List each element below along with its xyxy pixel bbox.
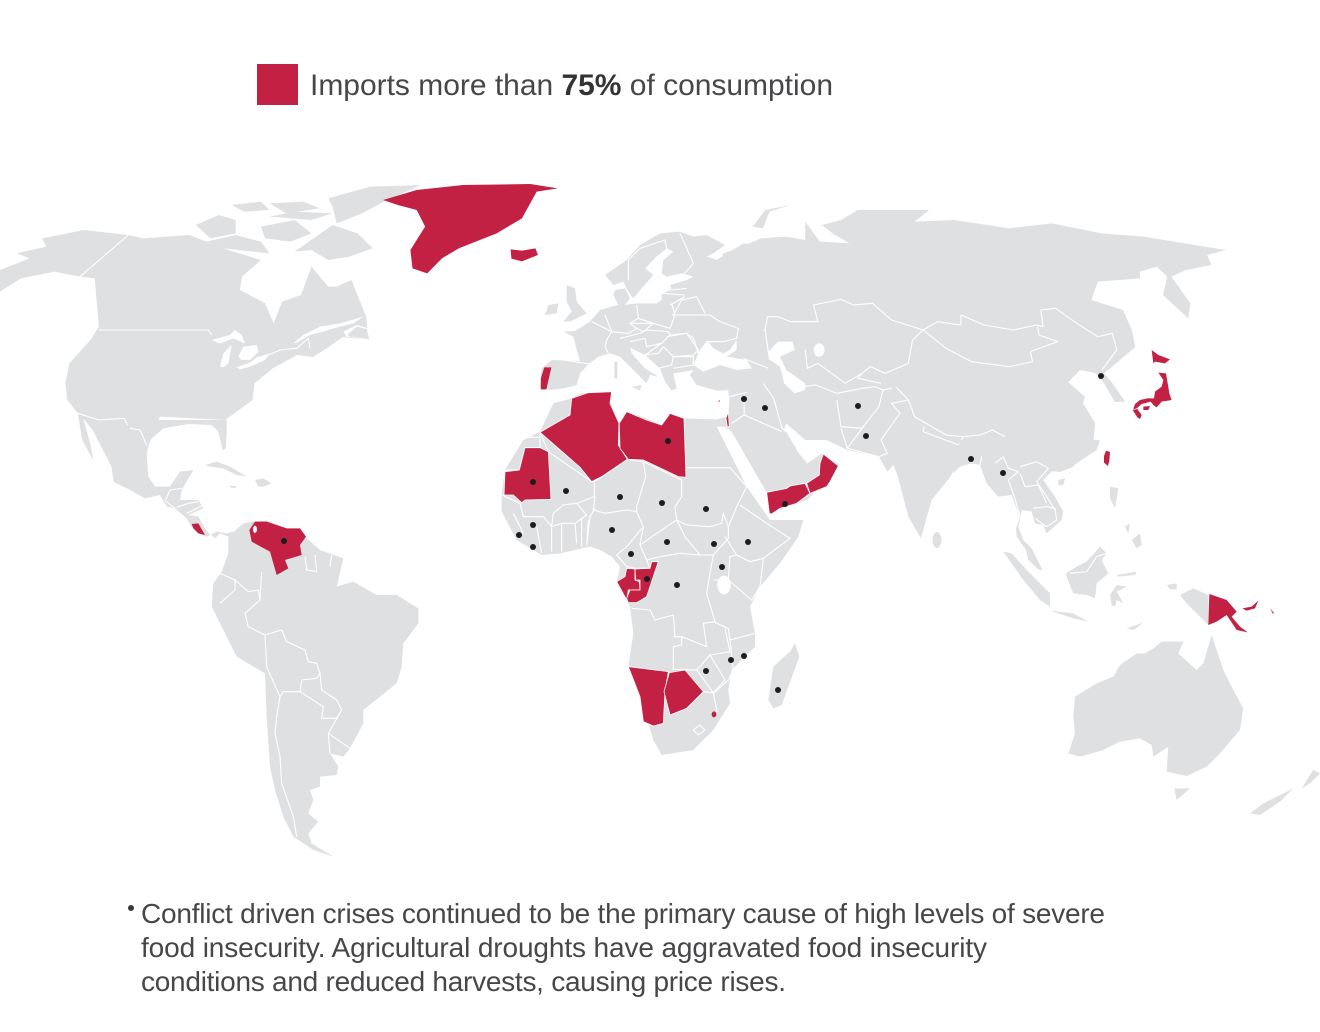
world map xyxy=(0,184,1320,857)
footnote text block xyxy=(128,898,1105,997)
footnote line 1: Conflict driven crises continued to be the primary cause of high levels of severe xyxy=(141,898,1105,929)
land: Africa and Madagascar with country borders xyxy=(502,392,803,755)
highlight: African and Middle East countries xyxy=(504,392,838,726)
bullet xyxy=(128,905,134,911)
highlighted countries: import more than 75% of consumption xyxy=(192,184,1274,726)
water: Great Lakes and Gulf of St Lawrence xyxy=(200,317,370,369)
black dots: countries in crisis xyxy=(281,373,1104,693)
land: Europe with country borders xyxy=(540,232,768,395)
highlight: Greenland, Iceland, Portugal xyxy=(383,184,558,389)
highlight: Papua New Guinea xyxy=(1208,594,1274,632)
land: Asia with country borders xyxy=(715,205,1226,538)
highlight: Venezuela xyxy=(249,522,306,575)
legend label: Imports more than 75% of consumption xyxy=(310,69,833,102)
footnote line 2: food insecurity. Agricultural droughts have aggravated food insecurity xyxy=(141,932,987,963)
legend swatch: red square xyxy=(257,64,298,105)
legend xyxy=(257,64,833,105)
land: Sri Lanka xyxy=(932,532,942,548)
land: Mexico, Central America and Caribbean xyxy=(114,420,272,538)
land: Oceania xyxy=(1068,583,1320,815)
highlight: Costa Rica xyxy=(192,523,205,535)
land: North America and Arctic islands xyxy=(0,185,421,482)
footnote line 3: conditions and reduced harvests, causing price rises. xyxy=(141,966,786,997)
land: Indochina, Malay peninsula, Indonesia and Philippines xyxy=(953,440,1142,622)
land: South America with country borders xyxy=(212,521,418,857)
highlight: Japan, Taiwan xyxy=(1104,350,1172,466)
